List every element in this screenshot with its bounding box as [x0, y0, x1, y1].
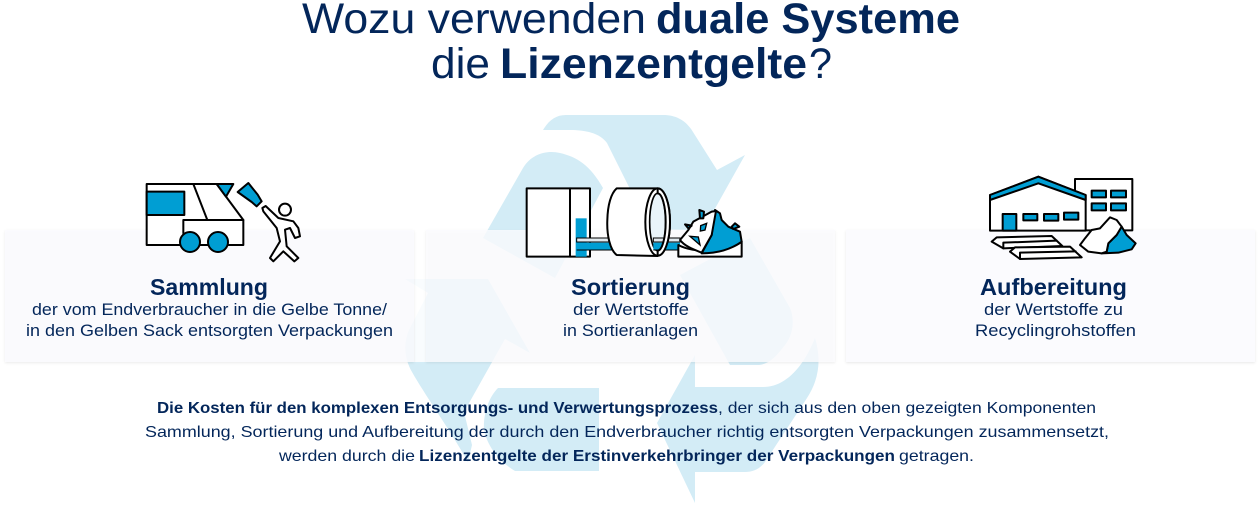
heading: Aufbereitung: Aufbereitung: [980, 274, 1127, 300]
text block: cost explanation: werden durch die: [278, 448, 415, 465]
text: Sortierung description: [563, 301, 698, 340]
text: Sortierung description: in Sortieranlagen: [563, 322, 698, 340]
icon: recycling plant with pile and ingots: [990, 177, 1136, 259]
background recycling symbol: [405, 115, 819, 503]
title: [302, 0, 960, 88]
panel: Aufbereitung: [846, 230, 1255, 362]
panel: Sortierung: [426, 230, 835, 362]
text block: cost explanation: [145, 400, 1109, 465]
text: Sammlung description: in den Gelben Sack entsorgten Verpackungen: [26, 322, 393, 340]
icon: sorting machine with drum and waste pile: [527, 188, 742, 257]
icon: collection truck and person: [147, 183, 300, 261]
gap veils between panels: [414, 230, 846, 362]
text block: cost explanation: Die Kosten für den komplexen Entsorgungs- und Verwertungsprozess: [157, 400, 718, 417]
title: Lizenzentgelte: [500, 40, 807, 88]
text: Aufbereitung description: der Wertstoffe zu: [984, 301, 1123, 319]
text: Aufbereitung description: [975, 301, 1136, 340]
title: ?: [809, 40, 832, 88]
text block: cost explanation: getragen.: [899, 448, 974, 465]
text: Aufbereitung description: Recyclingrohstoffen: [975, 322, 1136, 340]
heading: Sortierung: Sortierung: [571, 274, 690, 300]
text: Sortierung description: der Wertstoffe: [573, 301, 689, 319]
text: Sammlung description: der vom Endverbraucher in die Gelbe Tonne/: [32, 301, 387, 319]
text block: cost explanation: , der sich aus den oben gezeigten Komponenten: [718, 400, 1096, 417]
text: Sammlung description: [26, 301, 393, 340]
panel: Sammlung: [5, 230, 414, 362]
title: die: [431, 40, 490, 88]
text block: cost explanation: Sammlung, Sortierung und Aufbereitung der durch den Endverbraucher richtig entsorgten Verpackungen zusammensetzt,: [145, 424, 1109, 441]
text block: cost explanation: Lizenzentgelte der Erstinverkehrbringer der Verpackungen: [419, 448, 895, 465]
heading: Sammlung: Sammlung: [150, 274, 268, 300]
